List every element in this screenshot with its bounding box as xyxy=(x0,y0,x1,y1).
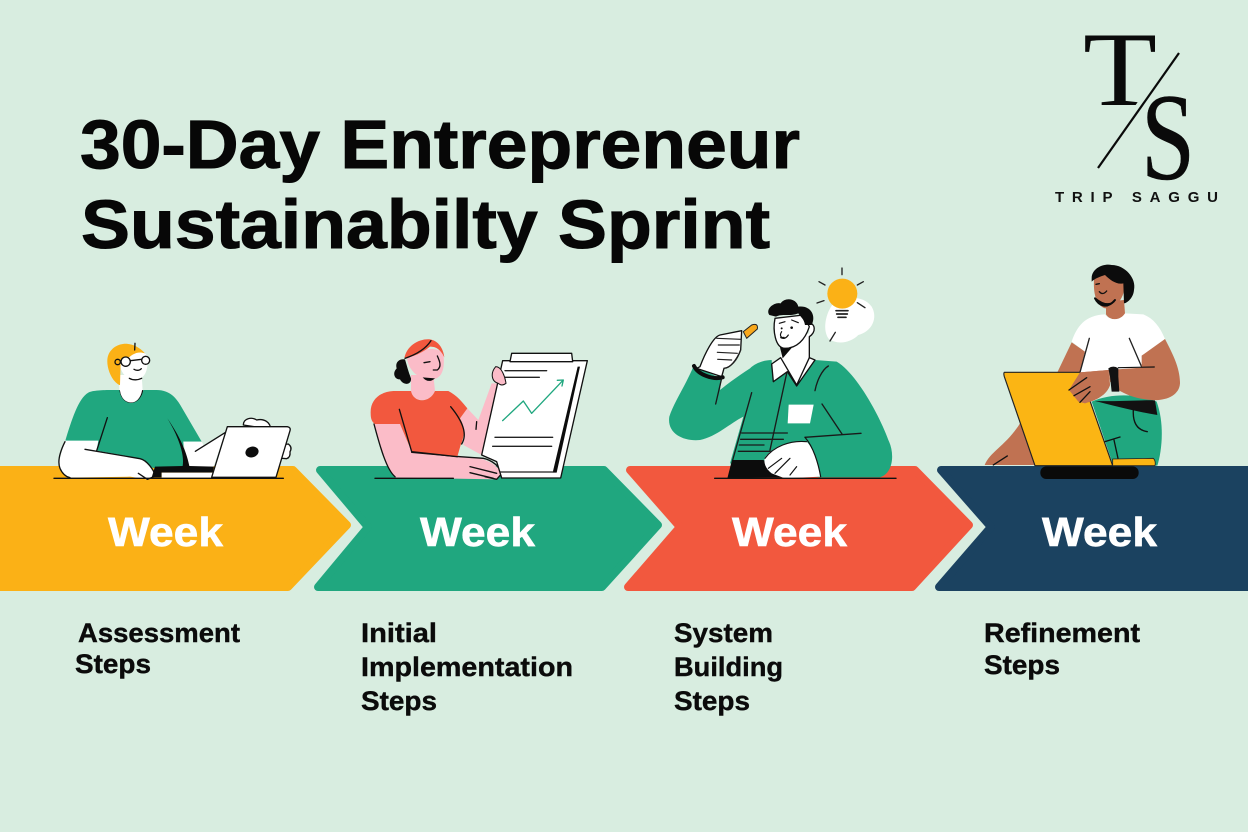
step label: week 3: Building xyxy=(674,652,783,682)
arrow: week 1 xyxy=(0,470,347,587)
title xyxy=(80,106,800,263)
step label: week 1 xyxy=(75,618,240,679)
figure: week 4 person with yellow laptop xyxy=(985,265,1180,479)
logo: Trip Saggu: T xyxy=(1083,11,1157,128)
icon: lightbulb xyxy=(817,268,874,342)
arrow: week 3 xyxy=(628,470,969,587)
figure: week 1 person with laptop xyxy=(54,343,291,479)
step label: week 1: Assessment xyxy=(78,618,240,648)
step label: week 2: Steps xyxy=(361,686,437,716)
title: 30-Day Entrepreneur xyxy=(80,106,800,183)
step label: week 2 xyxy=(361,618,573,716)
arrow: week 4 xyxy=(939,470,1248,587)
figure: week 3 person with lightbulb idea xyxy=(669,268,896,478)
step label: week 3: Steps xyxy=(674,686,750,716)
step label: week 2: Initial xyxy=(361,618,437,648)
step label: week 3 xyxy=(674,618,783,716)
step label: week 1: Steps xyxy=(75,649,151,679)
logo: Trip Saggu: TRIP SAGGU xyxy=(1055,189,1218,206)
step label: week 4: Refinement xyxy=(984,618,1140,648)
arrow: week 2 xyxy=(318,470,658,587)
arrow: week 3: Week xyxy=(732,509,847,555)
step label: week 4 xyxy=(984,618,1140,680)
arrow: week 1: Week xyxy=(108,509,223,555)
arrow: week 4: Week xyxy=(1042,509,1157,555)
figure: week 2 person with clipboard chart xyxy=(371,339,587,479)
step label: week 2: Implementation xyxy=(361,652,573,682)
logo: Trip Saggu xyxy=(1055,11,1218,206)
step label: week 4: Steps xyxy=(984,650,1060,680)
arrow: week 2: Week xyxy=(420,509,535,555)
logo: Trip Saggu: S xyxy=(1141,69,1195,206)
title: Sustainabilty Sprint xyxy=(81,186,770,263)
step label: week 3: System xyxy=(674,618,773,648)
